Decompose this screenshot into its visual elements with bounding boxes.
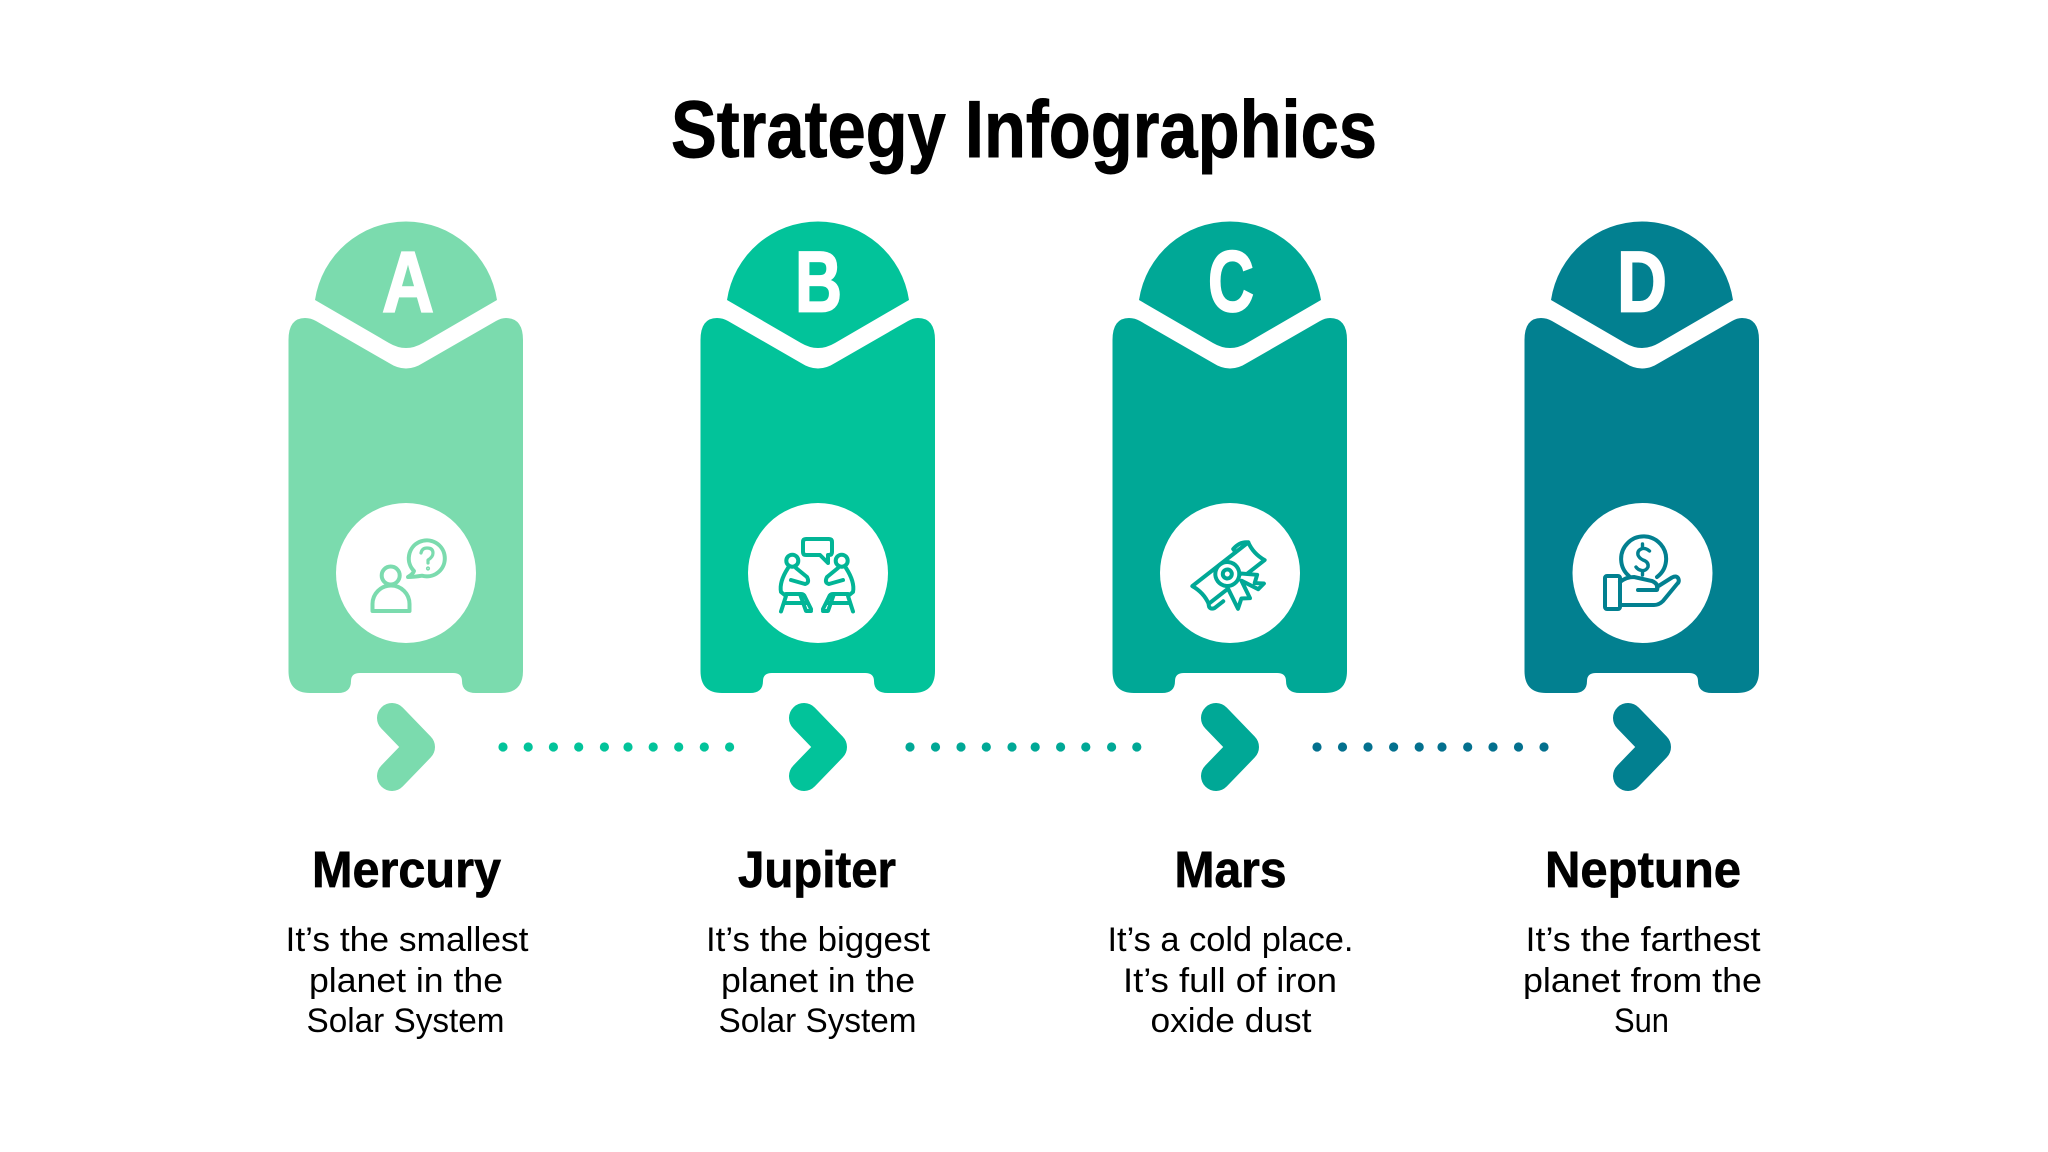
text block Jupiter: It’s the biggest [706,921,930,959]
icon circle A [336,503,476,643]
letter D: D [1617,234,1667,330]
panel: A Mercury [286,222,529,1040]
text block Mercury: It’s the smallest [286,921,529,959]
text block Neptune [1523,921,1762,1040]
heading Neptune: Neptune [1545,841,1741,898]
icon: two people talking [781,539,853,612]
letter B: B [795,234,842,330]
text block Mars: It’s full of iron [1123,962,1337,1000]
card D shape [1524,222,1759,693]
panel: B Jupiter [700,222,935,1040]
text block Neptune: It’s the farthest [1526,921,1761,959]
icon circle B [748,503,888,643]
title: Strategy Infographics [671,85,1377,175]
text block Jupiter: planet in the [721,962,915,1000]
icon circle D [1572,503,1712,643]
heading Jupiter: Jupiter [738,841,896,898]
text block Mercury: planet in the [309,962,503,1000]
card A shape [288,222,523,693]
dotted connector 2 [905,742,1141,752]
text block Mercury [286,921,529,1040]
panel: C Mars [1108,222,1354,1040]
text block Mars: It’s a cold place. [1108,921,1354,959]
text block Neptune: planet from the [1523,962,1762,1000]
heading Mercury: Mercury [312,841,502,898]
dotted connector 1 [498,742,734,752]
letter C: C [1208,234,1254,330]
icon: person asking question [372,540,445,611]
icon: hand holding coin [1605,536,1679,609]
card B shape [700,222,935,693]
text block Mercury: Solar System [306,1002,504,1040]
panel: D Neptune [1523,222,1762,1040]
icon circle C [1160,503,1300,643]
text block Neptune: Sun [1614,1002,1669,1040]
arrow A [392,718,420,776]
arrow B [804,718,832,776]
icon: diploma scroll [1190,538,1278,622]
text block Mars: oxide dust [1150,1002,1312,1040]
text block Jupiter [706,921,930,1040]
text block Mars [1108,921,1354,1040]
heading Mars: Mars [1174,841,1286,898]
arrow D [1628,718,1656,776]
arrow C [1216,718,1244,776]
letter A: A [382,234,434,330]
text block Jupiter: Solar System [718,1002,916,1040]
card C shape [1112,222,1347,693]
dotted connector 3 [1312,742,1549,752]
